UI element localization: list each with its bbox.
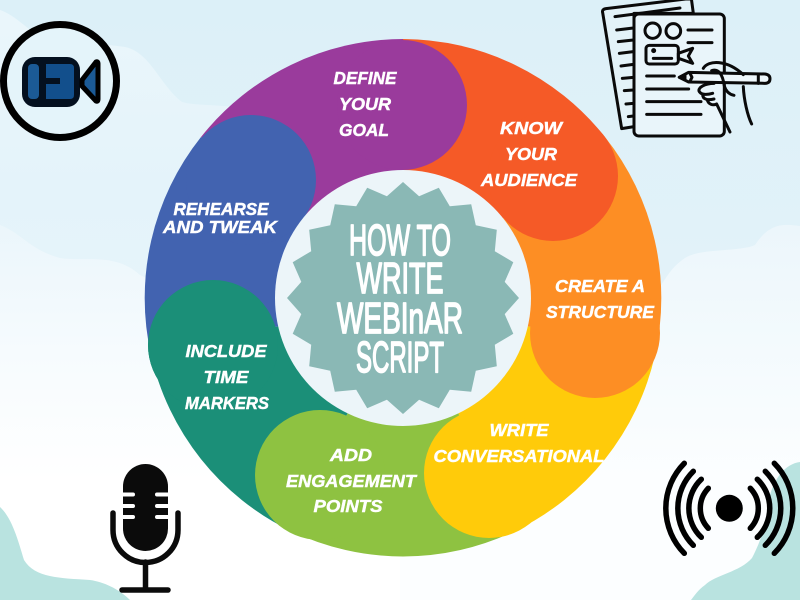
label: write conversational: WRITE — [490, 420, 550, 440]
label: include time markers: TIME — [204, 367, 250, 387]
pencil cap and tip — [690, 73, 758, 83]
label: define your goal: DEFINE — [334, 68, 398, 88]
label: rehearse and tweak — [162, 199, 278, 237]
label: create a structure: STRUCTURE — [546, 302, 655, 322]
title: SCRIPT — [356, 333, 444, 382]
label: add engagement points: ADD — [329, 445, 372, 465]
icon: broadcast signal — [666, 463, 793, 553]
background cloud: upper left — [0, 10, 300, 400]
label: know your audience: KNOW — [500, 118, 564, 138]
label: create a structure — [546, 276, 655, 322]
background cloud: bottom left teal — [0, 507, 130, 600]
label: write conversational: CONVERSATIONAL — [434, 446, 604, 466]
label: rehearse and tweak: REHEARSE — [174, 199, 270, 219]
segment: rehearse and tweak — [145, 115, 403, 355]
label: add engagement points: POINTS — [314, 496, 383, 516]
label: include time markers: INCLUDE — [186, 341, 268, 361]
segment: include time markers — [148, 280, 403, 531]
icon: video camera in circle — [4, 24, 116, 138]
label: know your audience: AUDIENCE — [480, 170, 578, 190]
label: add engagement points: ENGAGEMENT — [286, 471, 417, 491]
background cloud: right — [400, 225, 800, 600]
title: WEBInAR — [337, 294, 463, 343]
label: define your goal — [334, 68, 398, 140]
wheel of seven steps — [145, 39, 661, 556]
title: WRITE — [356, 254, 444, 303]
label: know your audience — [480, 118, 578, 190]
background cloud: bottom right teal — [691, 462, 800, 600]
page text lines — [647, 30, 712, 114]
front page — [634, 14, 724, 136]
label: define your goal: GOAL — [339, 120, 389, 140]
back page — [602, 0, 693, 129]
label: add engagement points — [286, 445, 417, 516]
segment: create a structure — [403, 137, 661, 398]
segment: write conversational — [403, 298, 655, 538]
label: include time markers — [185, 341, 269, 413]
background cloud: lower left — [0, 225, 400, 600]
label: rehearse and tweak: AND TWEAK — [162, 217, 278, 237]
icon: microphone — [113, 464, 178, 590]
label: define your goal: YOUR — [339, 94, 391, 114]
label: write conversational — [434, 420, 604, 466]
hand — [699, 62, 752, 132]
title: HOW TO — [349, 216, 451, 265]
storyboard camera — [645, 23, 693, 64]
segment: know your audience — [403, 39, 618, 298]
back page lines — [615, 8, 680, 117]
label: include time markers: MARKERS — [185, 393, 269, 413]
label: know your audience: YOUR — [505, 144, 557, 164]
segment: define your goal — [201, 39, 467, 298]
segment: add engagement points — [255, 298, 515, 556]
segment head: include time markers — [148, 280, 278, 410]
icon: script pages with hand and pencil — [602, 0, 770, 136]
pencil — [679, 72, 770, 83]
label: create a structure: CREATE A — [555, 276, 645, 296]
title — [337, 216, 463, 382]
starburst badge — [287, 182, 519, 414]
centre circle — [275, 170, 531, 426]
